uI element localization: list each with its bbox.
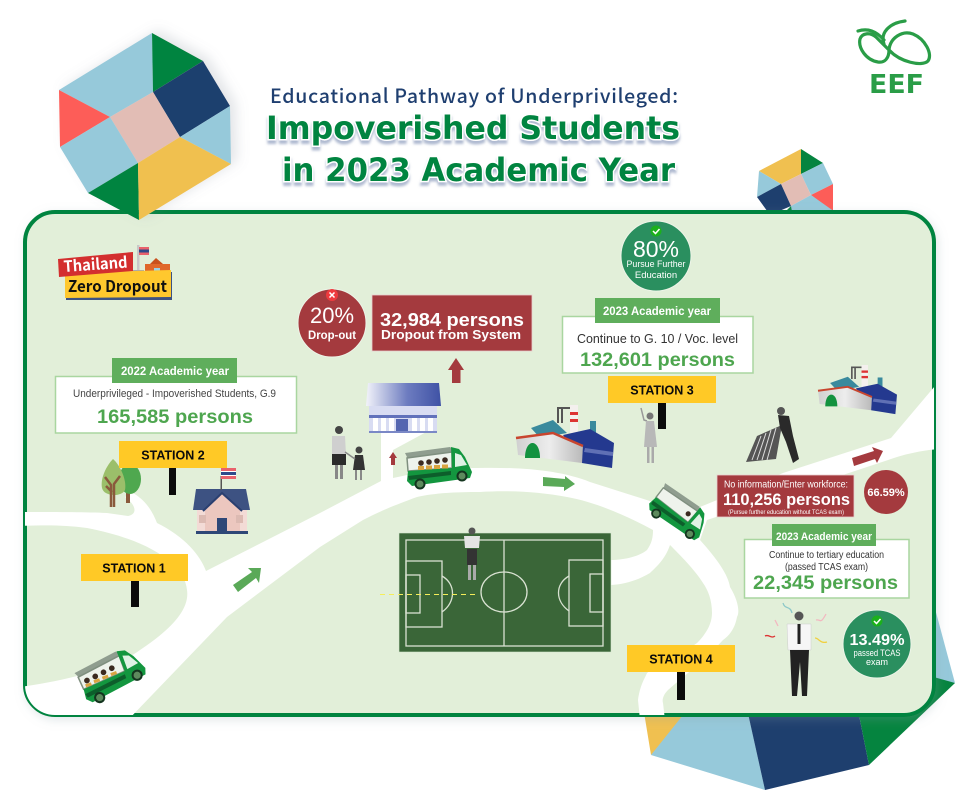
- sign: station 3: STATION 3: [630, 384, 694, 398]
- box: no information / enter workforce: [717, 475, 854, 517]
- arrow: green road arrow 2: [543, 476, 575, 491]
- sign: station 1: STATION 1: [102, 562, 166, 576]
- main title: in 2023 Academic Year: [282, 151, 675, 189]
- EEF wordmark: EEF: [869, 70, 924, 100]
- badge: 13.49 percent passed TCAS: passed TCAS: [854, 648, 900, 658]
- decorative hexagon: top left: [59, 33, 231, 220]
- arrow: red up large: [448, 358, 464, 383]
- bus 2 with passengers: [405, 447, 472, 488]
- badge: 80 percent pursue further education: 80%: [633, 236, 679, 262]
- subtitle: Educational Pathway of Underprivileged:: [270, 80, 678, 109]
- info box: 2022 academic year: 2022 Academic year: [121, 364, 229, 378]
- info box: continue to G.10: 2023 Academic year: [603, 304, 711, 318]
- red banner: [58, 252, 133, 277]
- school house: [193, 468, 250, 534]
- decorative hexagon: top right: [757, 149, 835, 215]
- box: dropout from system: Dropout from System: [381, 327, 521, 342]
- photo: graduate man with confetti: [765, 603, 827, 696]
- decorative hexagon: bottom right: [642, 590, 955, 790]
- badge: 13.49 percent passed TCAS: [843, 610, 911, 678]
- badge: 20 percent drop-out: 20%: [310, 303, 354, 328]
- sign: station 1: [81, 554, 188, 607]
- photo: mother and child: [332, 426, 365, 480]
- main title: Impoverished Students: [266, 109, 680, 147]
- badge: 66.59 percent: 66.59%: [867, 487, 905, 499]
- description line 1: Continue to tertiary education: [769, 550, 884, 561]
- info box: 2022 academic year: [56, 358, 296, 433]
- badge: 80 percent pursue further education: Education: [635, 270, 677, 281]
- arrow: red road arrow: [852, 447, 883, 466]
- flag and pole: [133, 245, 149, 274]
- info box: continue to G.10: [562, 298, 753, 373]
- logo: Thailand Zero Dropout: [58, 245, 172, 300]
- info box: tertiary education: 2023 Academic year: [776, 531, 873, 543]
- photo: boy on field: [464, 528, 480, 580]
- yellow banner: [65, 270, 171, 298]
- main title: [266, 109, 680, 189]
- badge: 66.59 percent: [864, 470, 908, 514]
- tag: 2022: [112, 358, 237, 383]
- banner text: Zero Dropout: Zero Dropout: [68, 273, 167, 297]
- box: dropout from system: 32,984 persons: [380, 310, 524, 330]
- badge: 13.49 percent passed TCAS: 13.49%: [850, 632, 904, 649]
- box: no information / enter workforce: (Pursue further education without TCAS exam): [728, 509, 844, 516]
- title block: [266, 80, 680, 189]
- tag: 2023: [595, 298, 720, 323]
- sign: station 4: STATION 4: [649, 652, 713, 666]
- bus 1 with passengers: [72, 644, 151, 707]
- icon: green check small: [872, 616, 882, 626]
- description: Continue to G. 10 / Voc. level: [577, 332, 738, 346]
- badge: 13.49 percent passed TCAS: exam: [866, 657, 888, 667]
- chalk lines: [406, 540, 603, 646]
- badge: 20 percent drop-out: [298, 289, 366, 357]
- count: 165,585 persons: [97, 406, 253, 428]
- photo: worker pulling metal sheets: [746, 407, 799, 463]
- badge: 80 percent pursue further education: [621, 221, 691, 291]
- info box: tertiary education: [744, 524, 909, 598]
- factory 1: [516, 405, 614, 468]
- main panel: [25, 212, 934, 715]
- box: dropout from system: [372, 295, 532, 351]
- road network: [20, 380, 940, 720]
- badge: 20 percent drop-out: Drop-out: [308, 330, 356, 342]
- icon: red cross: [326, 289, 338, 301]
- sign: station 2: [119, 441, 227, 495]
- icon: green check: [650, 226, 662, 236]
- photo: woman waving: [641, 408, 657, 463]
- box: no information / enter workforce: No information/Enter workforce:: [724, 478, 848, 490]
- tag: 2023 tertiary: [772, 524, 876, 546]
- box: no information / enter workforce: 110,256 persons: [723, 490, 850, 509]
- count: 22,345 persons: [753, 572, 898, 594]
- EEF logo: [858, 21, 930, 100]
- sign: station 3: [608, 376, 716, 429]
- factory 2: [818, 365, 897, 414]
- arrow: green road arrow 1: [233, 568, 261, 592]
- description line 2: (passed TCAS exam): [785, 562, 868, 573]
- sign: station 2: STATION 2: [141, 448, 205, 462]
- sign: station 4: [627, 645, 735, 700]
- small school icon: [145, 258, 170, 274]
- bus 3 driving downhill: [643, 479, 715, 549]
- soccer field: [380, 533, 611, 652]
- arrow: red up small: [389, 452, 397, 465]
- dropout school building: [366, 383, 441, 433]
- trees: [102, 459, 141, 507]
- banner text: Thailand: Thailand: [63, 251, 128, 277]
- description: Underprivileged - Impoverished Students, G.9: [73, 388, 276, 400]
- badge: 80 percent pursue further education: Pursue Further: [626, 259, 686, 270]
- count: 132,601 persons: [580, 349, 735, 371]
